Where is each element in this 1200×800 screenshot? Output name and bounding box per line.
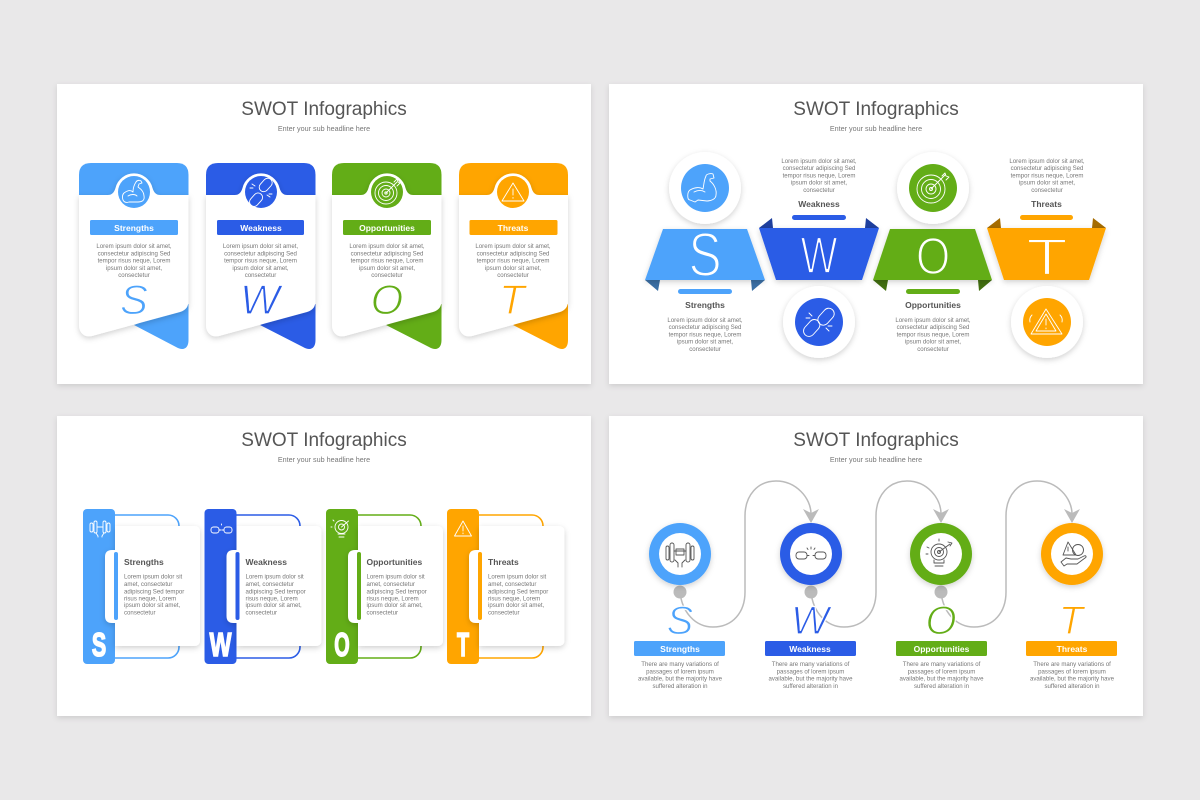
ribbon: W bbox=[759, 218, 879, 284]
card: Strengths: tempor risus neque, Lorem bbox=[98, 258, 170, 264]
icon: target bbox=[375, 179, 400, 204]
card: Threats: Lorem ipsum dolor sit amet, bbox=[475, 243, 551, 250]
step: Opportunities: There are many variations of bbox=[903, 661, 981, 668]
icon: warning triangle bbox=[502, 183, 524, 201]
icon: hand with warning and gear bbox=[1061, 542, 1086, 566]
step: Weakness: available, but the majority have bbox=[768, 676, 853, 682]
card: Opportunities bbox=[332, 163, 442, 349]
icon: idea target bbox=[331, 520, 348, 537]
card: Weakness: Lorem ipsum dolor sit amet, bbox=[223, 243, 298, 250]
tab card: Threats: ipsum dolor sit amet, bbox=[488, 602, 545, 609]
text block: Weakness: tempor risus neque, Lorem bbox=[783, 172, 855, 179]
card: Strengths: consectetur adipiscing Sed bbox=[98, 250, 170, 257]
ribbon: W: W bbox=[801, 225, 838, 284]
tab card: Threats: Lorem ipsum dolor sit bbox=[488, 574, 547, 580]
tab card: Strengths: adipiscing Sed tempor bbox=[124, 588, 184, 595]
step: Threats: There are many variations of bbox=[1033, 661, 1111, 668]
step: Opportunities: Opportunities bbox=[914, 644, 970, 654]
title: SWOT Infographics bbox=[793, 99, 959, 120]
text block: Threats: tempor risus neque, Lorem bbox=[1011, 172, 1083, 179]
tab card: Weakness: Weakness bbox=[246, 557, 287, 567]
ribbon: S: S bbox=[688, 220, 722, 289]
title: SWOT Infographics bbox=[793, 430, 959, 451]
card: Strengths bbox=[79, 163, 188, 349]
icon: warning bbox=[454, 521, 472, 536]
tab card: Threats: amet, consectetur bbox=[488, 581, 536, 588]
title: SWOT Infographics bbox=[241, 99, 407, 120]
tab card: Threats: T bbox=[457, 626, 469, 663]
tab card: Threats: Threats bbox=[488, 557, 519, 567]
step: Weakness bbox=[765, 523, 856, 690]
card: Threats: consectetur adipiscing Sed bbox=[477, 250, 549, 257]
tab card: Weakness: Lorem ipsum dolor sit bbox=[246, 574, 304, 580]
icon: broken chain bbox=[248, 176, 274, 208]
icon badge: broken chain bbox=[783, 286, 855, 358]
step: Threats: T bbox=[1059, 599, 1086, 643]
text block: Weakness: Weakness bbox=[798, 199, 840, 209]
tab card: Strengths bbox=[83, 509, 200, 664]
icon badge: warning bbox=[1011, 286, 1083, 358]
step: Weakness: Weakness bbox=[789, 644, 831, 654]
text block: Strengths: ipsum dolor sit amet, bbox=[677, 339, 733, 346]
card: Strengths: S bbox=[120, 276, 148, 323]
text block: Opportunities bbox=[895, 289, 971, 353]
tab card: Strengths: Strengths bbox=[124, 557, 164, 567]
tab card: Opportunities: O bbox=[334, 626, 350, 663]
tab card: Threats bbox=[447, 509, 564, 664]
step: Threats: passages of lorem ipsum bbox=[1038, 668, 1106, 676]
tab card: Opportunities: amet, consectetur bbox=[366, 581, 415, 588]
text block: Opportunities: ipsum dolor sit amet, bbox=[905, 339, 961, 346]
card: Threats: consectetur bbox=[497, 272, 529, 279]
card: Weakness: Weakness bbox=[240, 223, 282, 233]
panel: tab style SWOT bbox=[57, 416, 591, 716]
card: Opportunities: Lorem ipsum dolor sit amet, bbox=[349, 243, 425, 250]
icon: flexed arm bbox=[122, 180, 144, 202]
step: Strengths: Strengths bbox=[660, 644, 700, 654]
step: Strengths: S bbox=[667, 599, 694, 643]
card: Weakness bbox=[206, 163, 316, 349]
text block: Threats: consectetur adipiscing Sed bbox=[1011, 165, 1083, 172]
step: Threats: available, but the majority have bbox=[1030, 676, 1115, 682]
text block: Strengths: consectetur bbox=[689, 346, 721, 353]
panel: card style SWOT bbox=[57, 84, 591, 384]
step: Weakness: W bbox=[791, 599, 832, 643]
tab card: Weakness: ipsum dolor sit amet, bbox=[246, 602, 302, 609]
text block: Opportunities: Lorem ipsum dolor sit amet, bbox=[895, 317, 971, 324]
step: Weakness: There are many variations of bbox=[772, 661, 850, 668]
card: Threats: T bbox=[499, 276, 528, 323]
icon: broken chain bbox=[796, 547, 826, 559]
step: Threats: Threats bbox=[1057, 644, 1088, 654]
card: Weakness: consectetur bbox=[245, 272, 276, 279]
icon: broken chain bbox=[211, 524, 232, 533]
text block: Threats: Threats bbox=[1031, 199, 1062, 209]
step: Strengths bbox=[634, 523, 725, 690]
card: Threats: tempor risus neque, Lorem bbox=[477, 258, 549, 264]
tab card: Weakness bbox=[204, 509, 322, 664]
tab card: Opportunities: Lorem ipsum dolor sit bbox=[366, 574, 425, 580]
card: Opportunities: tempor risus neque, Lorem bbox=[351, 258, 423, 264]
card: Strengths: ipsum dolor sit amet, bbox=[106, 265, 162, 272]
tab card: Strengths: amet, consectetur bbox=[124, 581, 172, 588]
card: Threats: ipsum dolor sit amet, bbox=[485, 265, 541, 272]
card: Opportunities: O bbox=[371, 276, 403, 323]
ribbon: O bbox=[873, 228, 992, 291]
card: Opportunities: consectetur adipiscing Sed bbox=[351, 250, 423, 257]
text block: Strengths: Strengths bbox=[685, 300, 725, 310]
subtitle: Enter your sub headline here bbox=[830, 124, 922, 133]
icon: bulb target bbox=[926, 539, 952, 566]
text block: Strengths: consectetur adipiscing Sed bbox=[669, 324, 741, 331]
tab card: Strengths: ipsum dolor sit amet, bbox=[124, 602, 181, 609]
card: Weakness: ipsum dolor sit amet, bbox=[232, 265, 289, 272]
card: Weakness: tempor risus neque, Lorem bbox=[224, 258, 297, 264]
step: Threats bbox=[1026, 523, 1117, 690]
tab card: Opportunities: Opportunities bbox=[366, 557, 422, 567]
tab card: Weakness: amet, consectetur bbox=[246, 581, 294, 588]
arrow: connector W to O bbox=[811, 481, 949, 627]
text block: Opportunities: consectetur bbox=[917, 346, 949, 353]
subtitle: Enter your sub headline here bbox=[278, 124, 370, 133]
tab card: Weakness: W bbox=[210, 627, 231, 664]
tab card: Threats: adipiscing Sed tempor bbox=[488, 588, 548, 595]
tab card: Weakness: risus neque, Lorem bbox=[246, 596, 298, 602]
text block: Threats: ipsum dolor sit amet, bbox=[1019, 180, 1075, 187]
step: Opportunities: passages of lorem ipsum bbox=[908, 668, 975, 676]
arrow: connector O to T bbox=[941, 481, 1080, 627]
tab card: Opportunities bbox=[326, 509, 443, 664]
step: Weakness: suffered alteration in bbox=[783, 683, 838, 690]
icon badge: arm bbox=[669, 152, 741, 224]
text block: Weakness: consectetur adipiscing Sed bbox=[783, 165, 855, 172]
tab card: Strengths: risus neque, Lorem bbox=[124, 596, 176, 602]
card: Strengths: consectetur bbox=[118, 272, 150, 279]
text block: Opportunities: Opportunities bbox=[905, 300, 961, 310]
step: Threats: suffered alteration in bbox=[1044, 683, 1100, 690]
text block: Weakness: ipsum dolor sit amet, bbox=[791, 180, 847, 187]
arrow: connector S to W bbox=[680, 481, 819, 627]
tab card: Strengths: consectetur bbox=[124, 610, 156, 616]
text block: Threats: consectetur bbox=[1031, 187, 1063, 194]
icon badge: target bbox=[897, 152, 969, 224]
tab card: Weakness: consectetur bbox=[246, 610, 277, 616]
ribbon: S bbox=[645, 220, 765, 291]
step: Opportunities: suffered alteration in bbox=[914, 683, 969, 690]
ribbon: T: T bbox=[1026, 228, 1068, 286]
icon: dumbbell bbox=[90, 521, 110, 537]
step: Opportunities bbox=[896, 523, 987, 690]
tab card: Threats: risus neque, Lorem bbox=[488, 596, 540, 602]
text block: Opportunities: tempor risus neque, Lorem bbox=[897, 331, 969, 338]
tab card: Opportunities: consectetur bbox=[366, 610, 398, 616]
icon: dumbbell fist bbox=[666, 543, 694, 567]
card: Weakness: W bbox=[240, 276, 283, 323]
panel: flow style SWOT bbox=[609, 416, 1143, 716]
tab card: Opportunities: risus neque, Lorem bbox=[366, 596, 419, 602]
card: Opportunities: ipsum dolor sit amet, bbox=[359, 265, 415, 272]
card: Threats: Threats bbox=[498, 223, 529, 233]
text block: Weakness bbox=[781, 158, 857, 220]
subtitle: Enter your sub headline here bbox=[278, 455, 370, 464]
subtitle: Enter your sub headline here bbox=[830, 455, 922, 464]
card: Opportunities: consectetur bbox=[371, 272, 403, 279]
text block: Threats bbox=[1009, 158, 1085, 220]
ribbon: O: O bbox=[916, 228, 950, 286]
text block: Opportunities: consectetur adipiscing Sed bbox=[897, 324, 969, 331]
step: Opportunities: O bbox=[925, 599, 957, 643]
tab card: Threats: consectetur bbox=[488, 610, 520, 616]
text block: Weakness: consectetur bbox=[803, 187, 835, 194]
tab card: Strengths: Lorem ipsum dolor sit bbox=[124, 574, 183, 580]
tab card: Weakness: adipiscing Sed tempor bbox=[246, 588, 306, 595]
text block: Strengths: tempor risus neque, Lorem bbox=[669, 331, 741, 338]
text block: Weakness: Lorem ipsum dolor sit amet, bbox=[781, 158, 857, 165]
step: Strengths: passages of lorem ipsum bbox=[646, 668, 714, 676]
tab card: Opportunities: ipsum dolor sit amet, bbox=[366, 602, 423, 609]
text block: Strengths: Lorem ipsum dolor sit amet, bbox=[667, 317, 743, 324]
ribbon: T bbox=[987, 218, 1106, 286]
step: Strengths: There are many variations of bbox=[641, 661, 719, 668]
text block: Threats: Lorem ipsum dolor sit amet, bbox=[1009, 158, 1085, 165]
card: Strengths: Lorem ipsum dolor sit amet, bbox=[96, 243, 172, 250]
tab card: Opportunities: adipiscing Sed tempor bbox=[366, 588, 427, 595]
step: Opportunities: available, but the majority have bbox=[899, 676, 984, 682]
title: SWOT Infographics bbox=[241, 430, 407, 451]
card: Strengths: Strengths bbox=[114, 223, 154, 233]
text block: Strengths bbox=[667, 289, 743, 353]
card: Weakness: consectetur adipiscing Sed bbox=[224, 250, 297, 257]
panel: ribbon style SWOT bbox=[609, 84, 1143, 384]
tab card: Strengths: S bbox=[92, 626, 106, 663]
card: Threats bbox=[459, 163, 568, 349]
card: Opportunities: Opportunities bbox=[359, 223, 415, 233]
step: Weakness: passages of lorem ipsum bbox=[777, 668, 844, 676]
step: Strengths: suffered alteration in bbox=[652, 683, 708, 690]
step: Strengths: available, but the majority have bbox=[638, 676, 723, 682]
